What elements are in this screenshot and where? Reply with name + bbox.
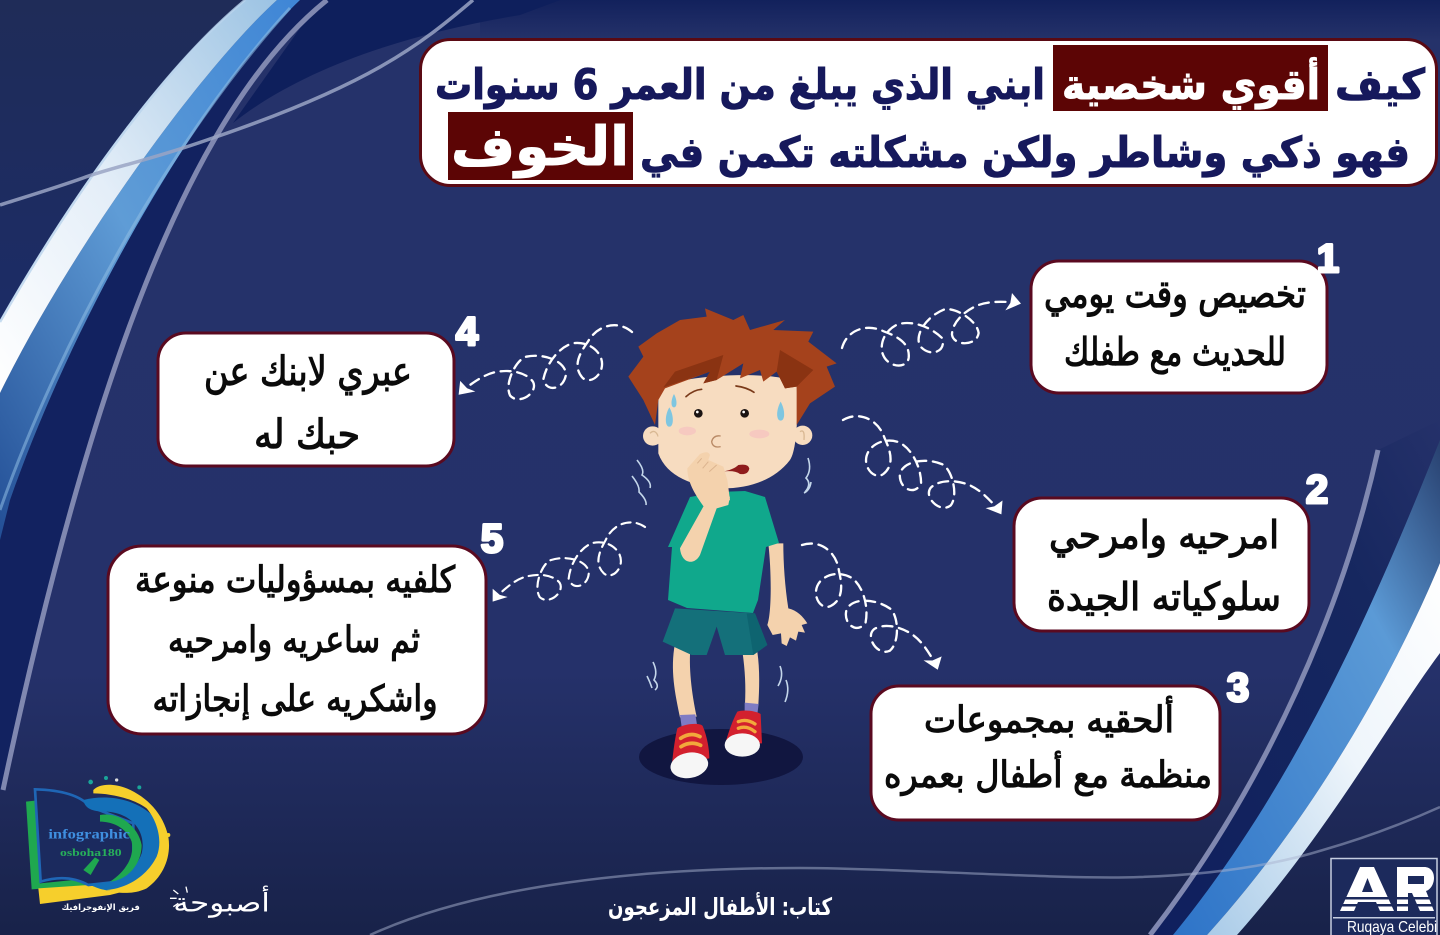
- arrow: boy to card 4: [453, 286, 642, 446]
- card 5: واشكريه على إنجازاته: [152, 679, 438, 720]
- card 2: سلوكياته الجيدة: [1047, 575, 1281, 620]
- decorative swoosh: top left: [0, 0, 473, 790]
- card 4: عبري لابنك عن: [204, 349, 412, 395]
- logo: infographic team: فريق الإنفوجرافيك: [61, 902, 140, 913]
- shake lines: [632, 458, 811, 702]
- card 1: للحديث مع طفلك: [1064, 330, 1286, 375]
- card 2: [1014, 498, 1309, 631]
- card 3: ألحقيه بمجموعات: [924, 696, 1174, 741]
- arrow: boy to card 3: [787, 515, 947, 704]
- illustration: frightened boy: [628, 308, 837, 785]
- logo: infographic team: infographic: [48, 826, 130, 841]
- arrow: boy to card 1: [842, 293, 1021, 366]
- number 1: 1: [1317, 237, 1339, 281]
- eyebrows and eyes: [686, 386, 754, 397]
- logo: infographic team: osboha180: [60, 848, 122, 859]
- number 4: 4: [456, 310, 479, 354]
- title line 1: [435, 60, 1426, 110]
- logo: AR Ruqaya Celebi: [1331, 858, 1437, 935]
- card 5: ثم ساعريه وامرحيه: [168, 620, 420, 661]
- title line 1: كيف: [1335, 60, 1426, 109]
- legs and shoes: [663, 608, 767, 781]
- highlight: strengthen personality: أقوي شخصية: [1062, 57, 1320, 110]
- card 3: [871, 686, 1220, 820]
- title panel: [420, 40, 1436, 186]
- card 2: امرحيه وامرحي: [1049, 513, 1279, 558]
- logo: osboha: أصبوحة: [173, 885, 270, 919]
- decorative swoosh: bottom right: [370, 420, 1440, 935]
- number 5: 5: [481, 517, 503, 561]
- arrow: boy to card 5: [486, 488, 655, 645]
- highlight: fear: الخوف: [451, 115, 629, 178]
- highlight: strengthen personality: [1053, 45, 1328, 111]
- green shirt: [668, 491, 779, 613]
- card 4: [158, 333, 454, 466]
- head and face: [628, 308, 837, 562]
- nose and mouth: [712, 436, 721, 447]
- raised hand and arm: [680, 497, 730, 562]
- number 3: 3: [1227, 666, 1249, 710]
- card 1: تخصيص وقت يومي: [1044, 272, 1306, 317]
- card 5: [108, 546, 486, 734]
- card 5: كلفيه بمسؤوليات منوعة: [135, 560, 456, 601]
- card 4: حبك له: [254, 412, 360, 458]
- arrow: boy to card 2: [831, 381, 1009, 558]
- number 2: 2: [1306, 468, 1328, 512]
- floor shadow: [639, 729, 803, 785]
- sweat drops: [671, 394, 676, 407]
- card 3: منظمة مع أطفال بعمره: [884, 751, 1212, 796]
- card 1: [1031, 261, 1327, 393]
- source citation: كتاب: الأطفال المزعجون: [608, 892, 832, 921]
- title line 1: ابني الذي يبلغ من العمر 6 سنوات: [435, 60, 1045, 110]
- right arm and hand: [767, 543, 807, 646]
- logo: infographic team: [26, 776, 170, 913]
- hair: [628, 308, 837, 425]
